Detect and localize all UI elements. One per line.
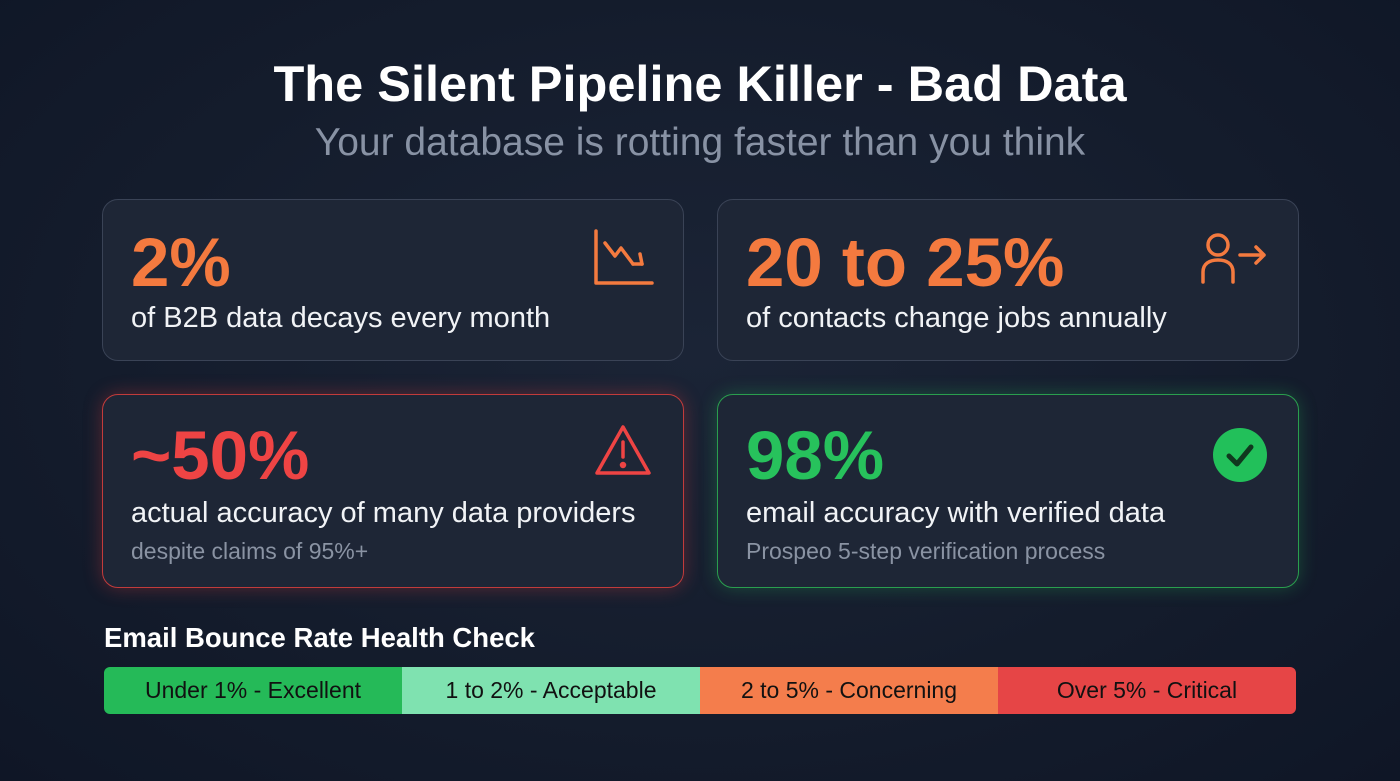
icon: check bbox=[1213, 428, 1267, 482]
panel: provider accuracy: actual accuracy of many data providers bbox=[131, 497, 636, 529]
segment: concerning: 2 to 5% - Concerning bbox=[741, 677, 957, 703]
segment: critical bbox=[998, 667, 1296, 714]
bounce rate bar bbox=[104, 667, 1296, 714]
title: The Silent Pipeline Killer - Bad Data bbox=[273, 55, 1127, 112]
panel: verified accuracy: email accuracy with verified data bbox=[746, 497, 1165, 529]
segment: acceptable: 1 to 2% - Acceptable bbox=[446, 677, 656, 703]
panel: provider accuracy bbox=[102, 394, 684, 588]
panel: data decay: of B2B data decays every month bbox=[131, 302, 550, 334]
panel: job changes: 20 to 25% bbox=[746, 224, 1064, 301]
segment: excellent: Under 1% - Excellent bbox=[145, 677, 361, 703]
icon: warning bbox=[595, 425, 651, 475]
panel: job changes: of contacts change jobs annually bbox=[746, 302, 1167, 334]
segment: excellent bbox=[104, 667, 402, 714]
segment: critical: Over 5% - Critical bbox=[1057, 677, 1237, 703]
panel: data decay bbox=[102, 199, 684, 361]
panel: verified accuracy: 98% bbox=[746, 417, 884, 494]
segment: acceptable bbox=[402, 667, 700, 714]
heading: bounce rate: Email Bounce Rate Health Check bbox=[104, 622, 535, 653]
icon: declining chart bbox=[594, 229, 654, 285]
panel: verified accuracy: Prospeo 5-step verification process bbox=[746, 538, 1105, 564]
panel: provider accuracy: ~50% bbox=[131, 417, 309, 494]
panel: job changes bbox=[717, 199, 1299, 361]
panel: verified accuracy bbox=[717, 394, 1299, 588]
panel: data decay: 2% bbox=[131, 224, 231, 301]
subtitle: Your database is rotting faster than you think bbox=[315, 121, 1085, 164]
icon: person leaving bbox=[1201, 233, 1266, 284]
segment: concerning bbox=[700, 667, 998, 714]
panel: provider accuracy: despite claims of 95%+ bbox=[131, 538, 368, 564]
